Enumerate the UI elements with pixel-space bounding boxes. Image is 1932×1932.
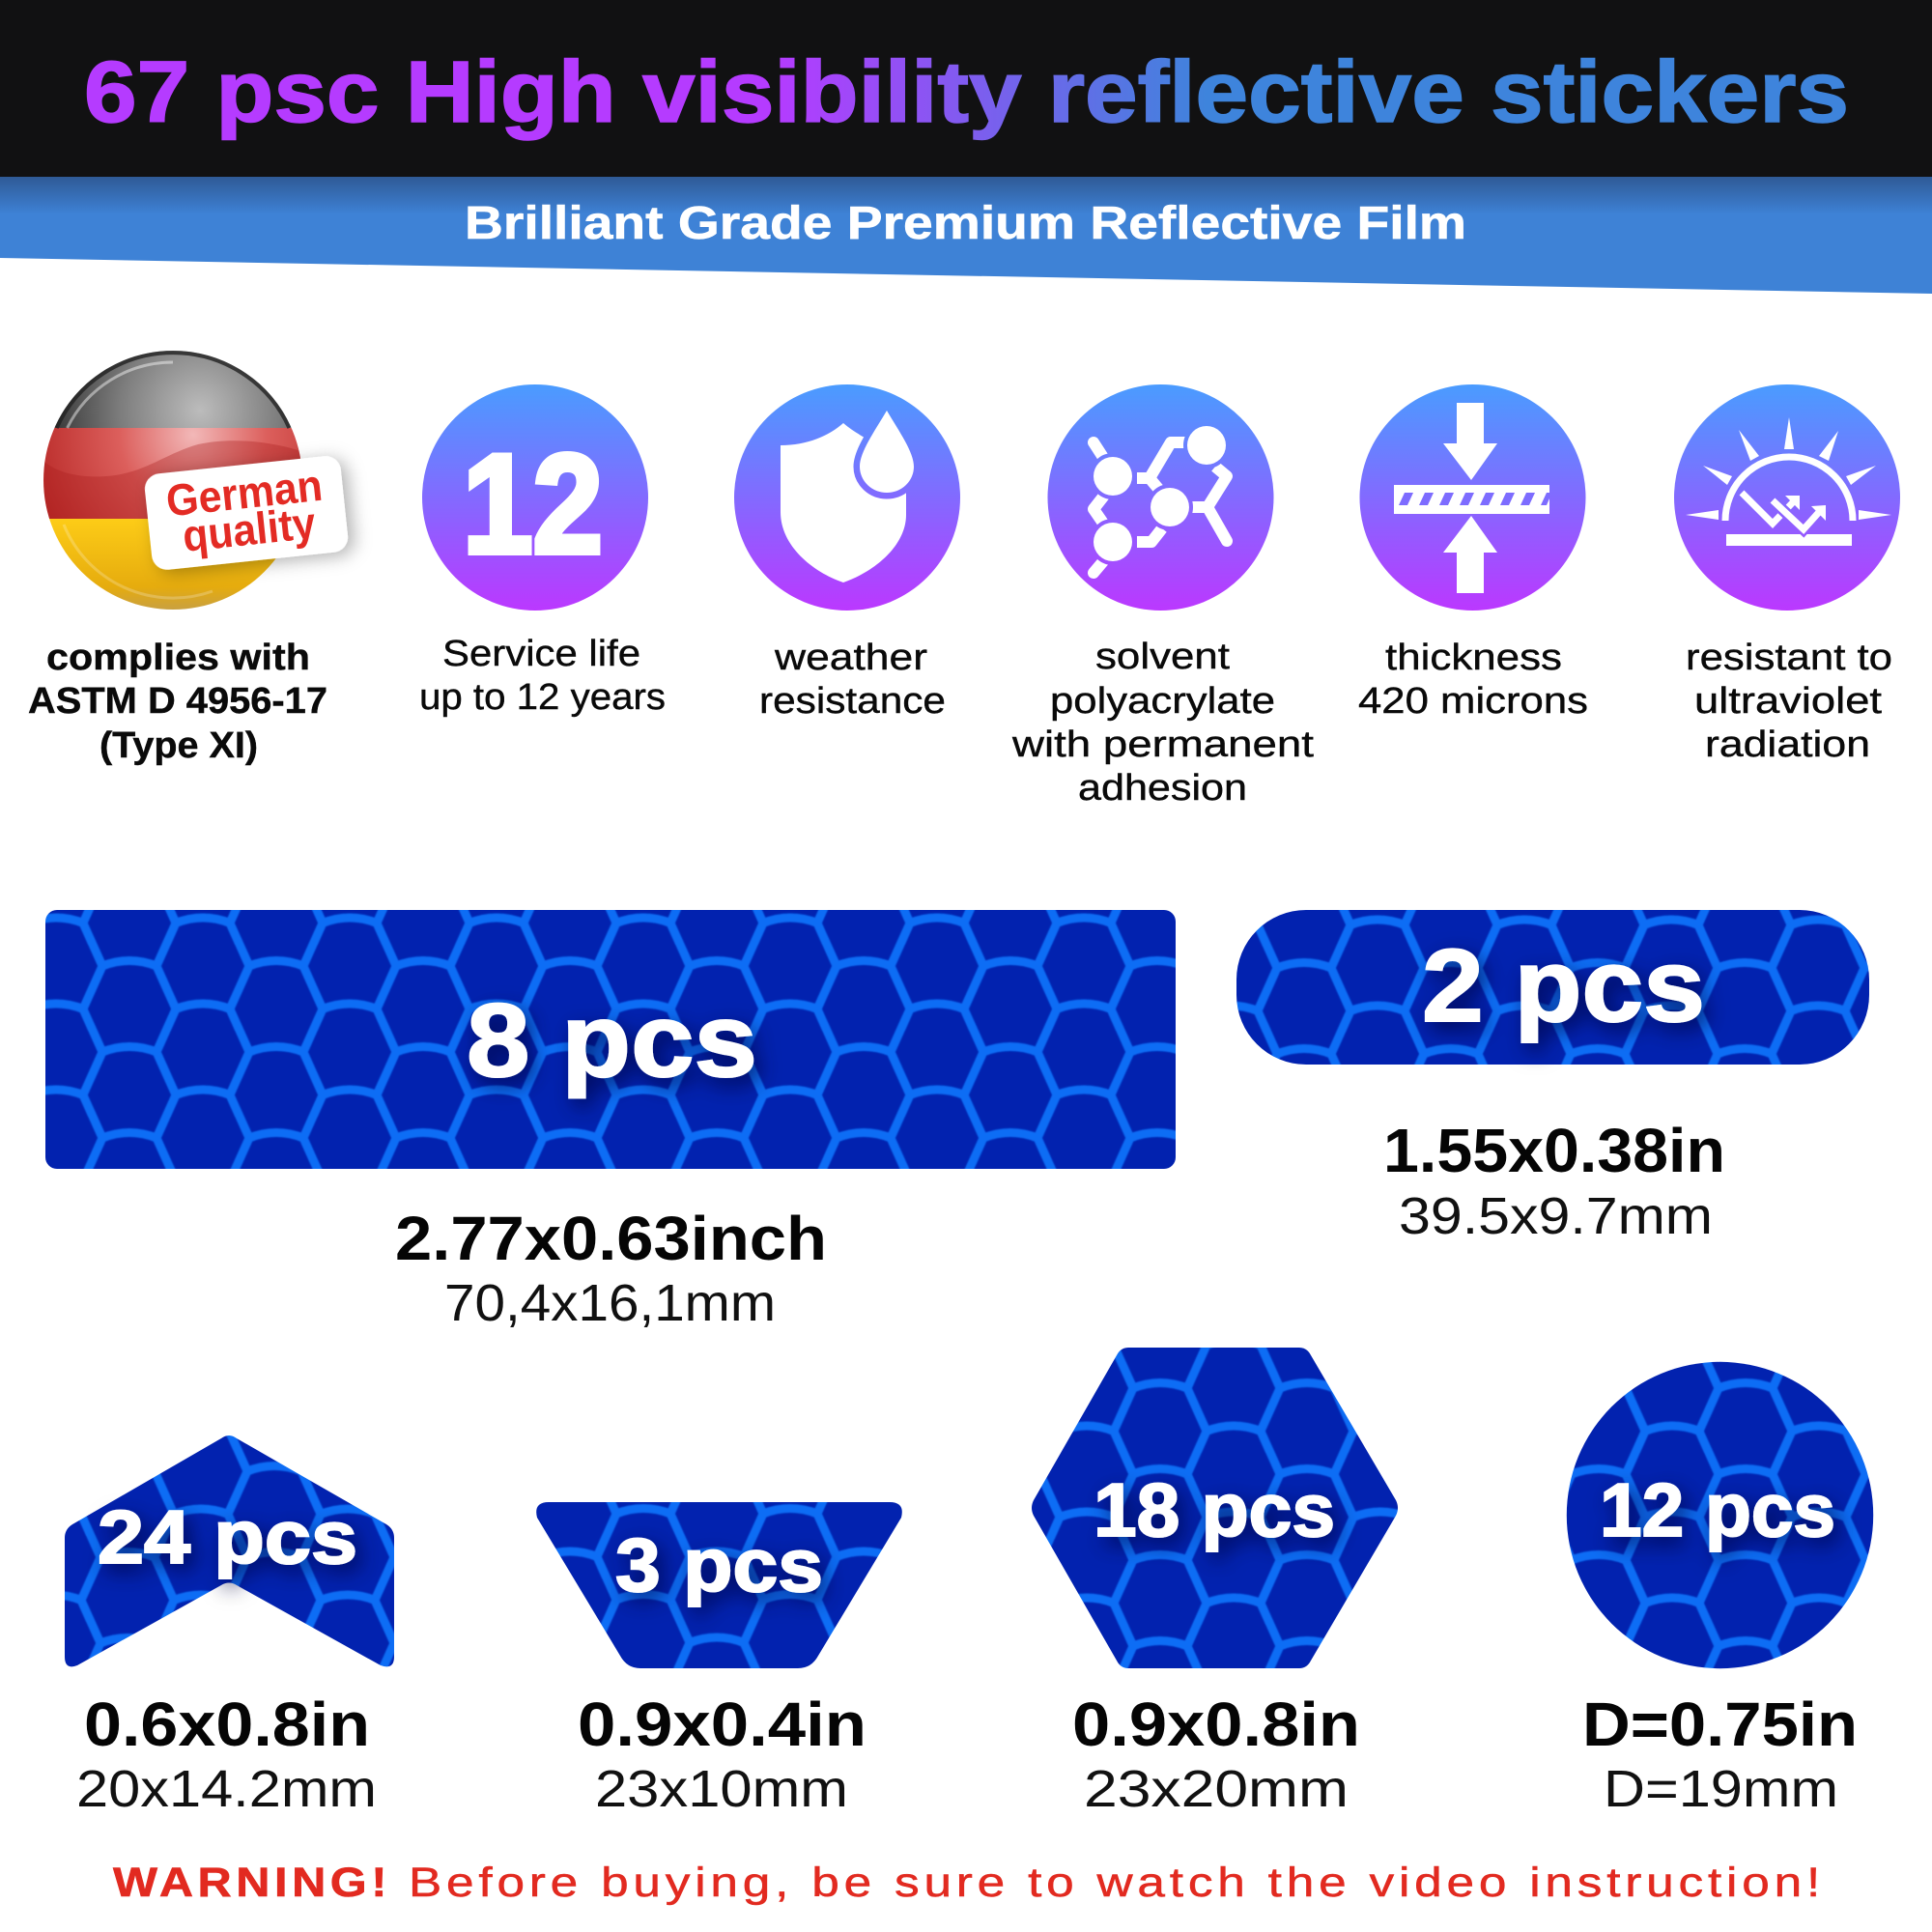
title: 67 psc High visibility reflective stickers [84,44,1849,141]
feature: German quality [28,348,350,766]
dimensions: 12 pcs: D=0.75in [1582,1690,1858,1759]
caption: complies with [46,638,310,678]
icon: thickness arrows [1360,384,1586,611]
feature: thickness [1358,384,1588,722]
caption: adhesion [1078,768,1247,809]
dimensions: 12 pcs: D=19mm [1604,1760,1838,1818]
dimensions: 8 pcs: 2.77x0.63inch [395,1204,827,1273]
badge: German quality: German [164,460,325,526]
caption: weather [774,638,927,678]
feature: UV resistance [1674,384,1900,765]
caption: radiation [1705,724,1870,765]
dimensions: 18 pcs: 0.9x0.8in [1072,1690,1360,1759]
dimensions: 8 pcs [395,1204,827,1332]
icon: shield and droplet [734,384,960,611]
badge: German quality [143,455,350,571]
subtitle: Brilliant Grade Premium Reflective Film [465,198,1466,249]
dimensions: 3 pcs: 23x10mm [595,1760,848,1818]
caption: 420 microns [1358,681,1588,722]
sticker: 18 pcs hexagon [1032,1348,1398,1668]
dimensions: 2 pcs [1383,1116,1725,1245]
sticker: 3 pcs trapezoid: 3 pcs [615,1522,823,1607]
icon: 12 years: 12 [463,425,603,582]
sticker: 24 pcs chevron [65,1435,394,1666]
feature: service life [419,384,666,718]
badge: German quality: quality [180,497,318,561]
subtitle band [0,177,1932,294]
sticker: 18 pcs hexagon: 18 pcs [1094,1467,1335,1552]
sticker: 12 pcs circle [1567,1362,1873,1668]
sticker: 8 pcs rectangle: 8 pcs [467,981,757,1098]
dimensions: 3 pcs [578,1690,867,1818]
sticker: 12 pcs circle: 12 pcs [1600,1467,1835,1552]
caption: (Type XI) [99,725,258,766]
dimensions: 24 pcs: 20x14.2mm [76,1760,377,1818]
feature: solvent polyacrylate [1011,384,1315,809]
feature: weather resistance [734,384,960,722]
caption [28,638,327,766]
dimensions: 2 pcs: 1.55x0.38in [1383,1116,1725,1185]
sticker: 3 pcs trapezoid [536,1502,902,1668]
caption [759,638,946,722]
sticker: 2 pcs pill: 2 pcs [1422,927,1705,1043]
caption: resistant to [1686,638,1892,678]
icon: molecule [1047,384,1273,611]
dimensions: 18 pcs [1072,1690,1360,1818]
sticker: 24 pcs chevron: 24 pcs [98,1494,357,1579]
sticker: 8 pcs rectangle [45,910,1176,1169]
caption: ultraviolet [1694,681,1883,722]
caption [1011,637,1315,809]
caption: Service life [442,634,640,674]
warning: Before buying, be sure to watch the video instruction! [409,1860,1825,1906]
caption [419,634,666,718]
caption: resistance [759,681,946,722]
dimensions: 18 pcs: 23x20mm [1084,1760,1349,1818]
caption [1358,638,1588,722]
caption: polyacrylate [1050,681,1275,722]
icon: 12 years [422,384,648,611]
caption: with permanent [1011,724,1315,765]
icon: sun and reflection [1674,384,1900,611]
dimensions: 24 pcs: 0.6x0.8in [84,1690,370,1759]
dimensions: 8 pcs: 70,4x16,1mm [444,1274,776,1332]
dimensions: 24 pcs [76,1690,377,1818]
dimensions: 3 pcs: 0.9x0.4in [578,1690,867,1759]
sticker: 2 pcs pill [1236,910,1869,1065]
caption: up to 12 years [419,677,666,718]
warning: WARNING! [113,1860,391,1906]
caption: ASTM D 4956-17 [28,681,327,722]
icon: German flag button [39,348,309,611]
dimensions: 2 pcs: 39.5x9.7mm [1399,1187,1713,1245]
caption [1686,638,1892,765]
title banner [0,0,1932,177]
caption: thickness [1385,638,1562,678]
caption: solvent [1095,637,1231,677]
dimensions: 12 pcs [1582,1690,1858,1818]
warning [113,1860,1825,1906]
